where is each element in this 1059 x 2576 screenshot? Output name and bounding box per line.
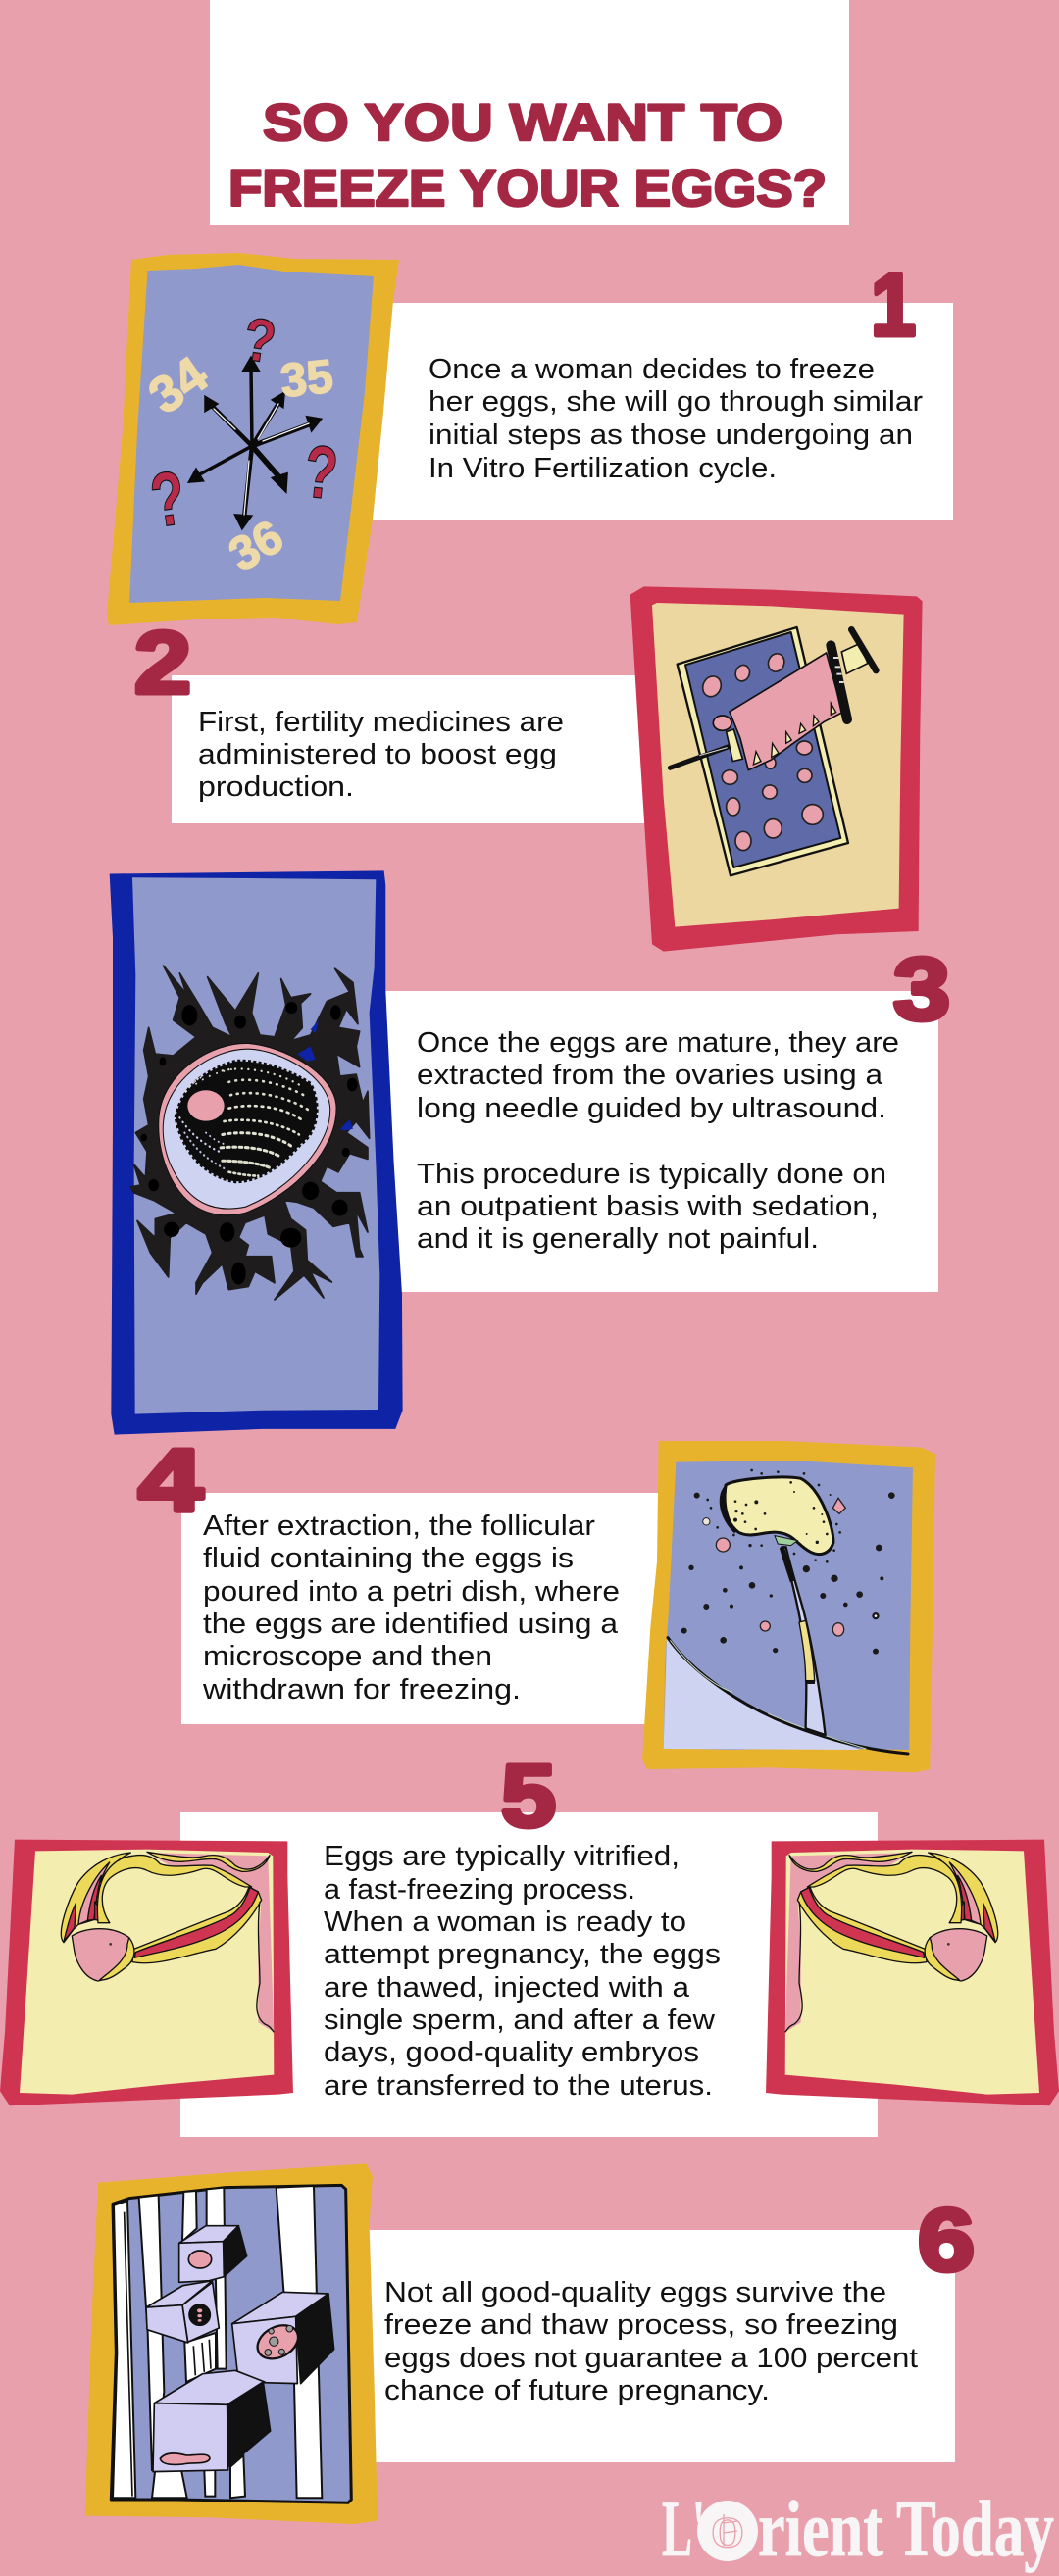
title [210, 0, 849, 225]
icon: zona pellucida ring [159, 1043, 336, 1215]
text block: step 3: Once the eggs are mature, they are [417, 1027, 899, 1059]
striped background [111, 2185, 351, 2502]
text block: step 1: her eggs, she will go through similar [429, 386, 923, 418]
text block: step 5: attempt pregnancy, the eggs [324, 1939, 721, 1970]
title: SO YOU WANT TO [263, 94, 782, 152]
panel: step 3 illustration, egg cell [110, 870, 403, 1435]
text block: step 3: long needle guided by ultrasound. [417, 1093, 886, 1124]
text block: step 3: and it is generally not painful. [417, 1223, 819, 1255]
panel: step 5 left illustration, ovary and fallopian tube [0, 1840, 293, 2105]
text block: step 1: Once a woman decides to freeze [429, 354, 875, 385]
icon: cube with dividing cell [146, 2281, 219, 2343]
text block: step 2: production. [198, 771, 354, 803]
number 4: 4 [138, 1432, 203, 1530]
logo: L'Orient Today: O [711, 2508, 744, 2556]
icon: nucleolus [187, 1090, 225, 1121]
text block: step 4: withdrawn for freezing. [202, 1674, 521, 1706]
panel: step 1 illustration, ages and question marks: 35 [278, 351, 335, 408]
ages: 34 [139, 346, 218, 425]
text block: step 2: administered to boost egg [198, 739, 557, 770]
text block: step 4: After extraction, the follicular [203, 1511, 595, 1542]
text block: step 5 [180, 1812, 878, 2137]
text block: step 5: are transferred to the uterus. [324, 2070, 713, 2102]
text block: step 4: microscope and then [203, 1641, 492, 1672]
text block: step 4: poured into a petri dish, where [203, 1576, 620, 1608]
icon: yellow egg mass [725, 1477, 833, 1555]
question marks: ? [239, 306, 280, 376]
text block: step 6: chance of future pregnancy. [384, 2375, 770, 2406]
number 3: 3 [893, 941, 950, 1039]
panel: step 1 illustration, ages and question marks: 36 [221, 511, 292, 582]
panel: step 1 illustration, ages and question marks: ? [300, 430, 341, 517]
text block: step 5: days, good-quality embryos [324, 2037, 699, 2068]
panel: step 5 right illustration, mirrored ovary and fallopian tube [766, 1840, 1059, 2105]
text block: step 1: In Vitro Fertilization cycle. [429, 453, 777, 484]
text block: step 3 [373, 991, 938, 1292]
text block: step 5: single sperm, and after a few [324, 2005, 716, 2036]
logo: L'Orient Today: L' [662, 2484, 705, 2573]
text block: step 2 [172, 675, 662, 823]
icon: mirrored tube and ovary [789, 1852, 998, 1981]
icon: pipette [782, 1547, 826, 1735]
text block: step 6: Not all good-quality eggs survive the [384, 2277, 886, 2308]
icon: cumulus cells [130, 966, 370, 1300]
icon: ovary [72, 1929, 133, 1981]
icon: blister pack [678, 627, 848, 875]
icon: cube with single egg [179, 2226, 247, 2282]
icon: fimbriae [61, 1852, 270, 1981]
text block: step 4 [181, 1493, 662, 1724]
panel: step 1 illustration, ages and question marks [107, 253, 399, 625]
text block: step 5: When a woman is ready to [324, 1907, 686, 1938]
icon: syringe [670, 747, 729, 768]
text block: step 5: are thawed, injected with a [324, 1972, 690, 2004]
text block: step 1: initial steps as those undergoing an [429, 420, 913, 451]
text block: step 4: the eggs are identified using a [203, 1609, 619, 1640]
number 1: 1 [871, 257, 916, 355]
text block: step 1 [363, 303, 953, 520]
text block: step 6: freeze and thaw process, so freezing [384, 2309, 898, 2341]
text block: step 3: extracted from the ovaries using a [417, 1060, 883, 1091]
text block: step 2: First, fertility medicines are [198, 707, 564, 738]
number 5: 5 [501, 1748, 556, 1846]
icon: cube with embryo transfer [153, 2370, 271, 2472]
title: FREEZE YOUR EGGS? [228, 160, 827, 218]
text block: step 5: Eggs are typically vitrified, [324, 1841, 680, 1872]
panel: step 2 illustration, syringe and pills [630, 586, 923, 952]
number 2: 2 [134, 615, 191, 713]
icon: fallopian tube [132, 1887, 262, 1963]
text block: step 5: a fast-freezing process. [324, 1874, 635, 1906]
icon: granular nucleus [176, 1062, 317, 1181]
text block: step 3: This procedure is typically done on [417, 1159, 886, 1190]
panel: step 6 illustration, frozen egg cubes [85, 2163, 378, 2524]
text block: step 6: eggs does not guarantee a 100 percent [384, 2343, 918, 2374]
panel: step 4 illustration, pipette and egg [642, 1441, 935, 1772]
logo: L'Orient Today: rient [758, 2484, 883, 2573]
icon: dish surface [664, 1639, 860, 1750]
icon: radiating arrows [190, 359, 320, 527]
logo: L'Orient Today [662, 2484, 1054, 2573]
text block: step 6 [353, 2230, 955, 2462]
text block: step 4: fluid containing the eggs is [203, 1543, 574, 1574]
panel: step 1 illustration, ages and question marks: ? [145, 455, 190, 544]
text block: step 3: an outpatient basis with sedation, [417, 1191, 879, 1222]
number 6: 6 [918, 2192, 975, 2290]
icon: cube with spotted embryo [232, 2292, 334, 2384]
